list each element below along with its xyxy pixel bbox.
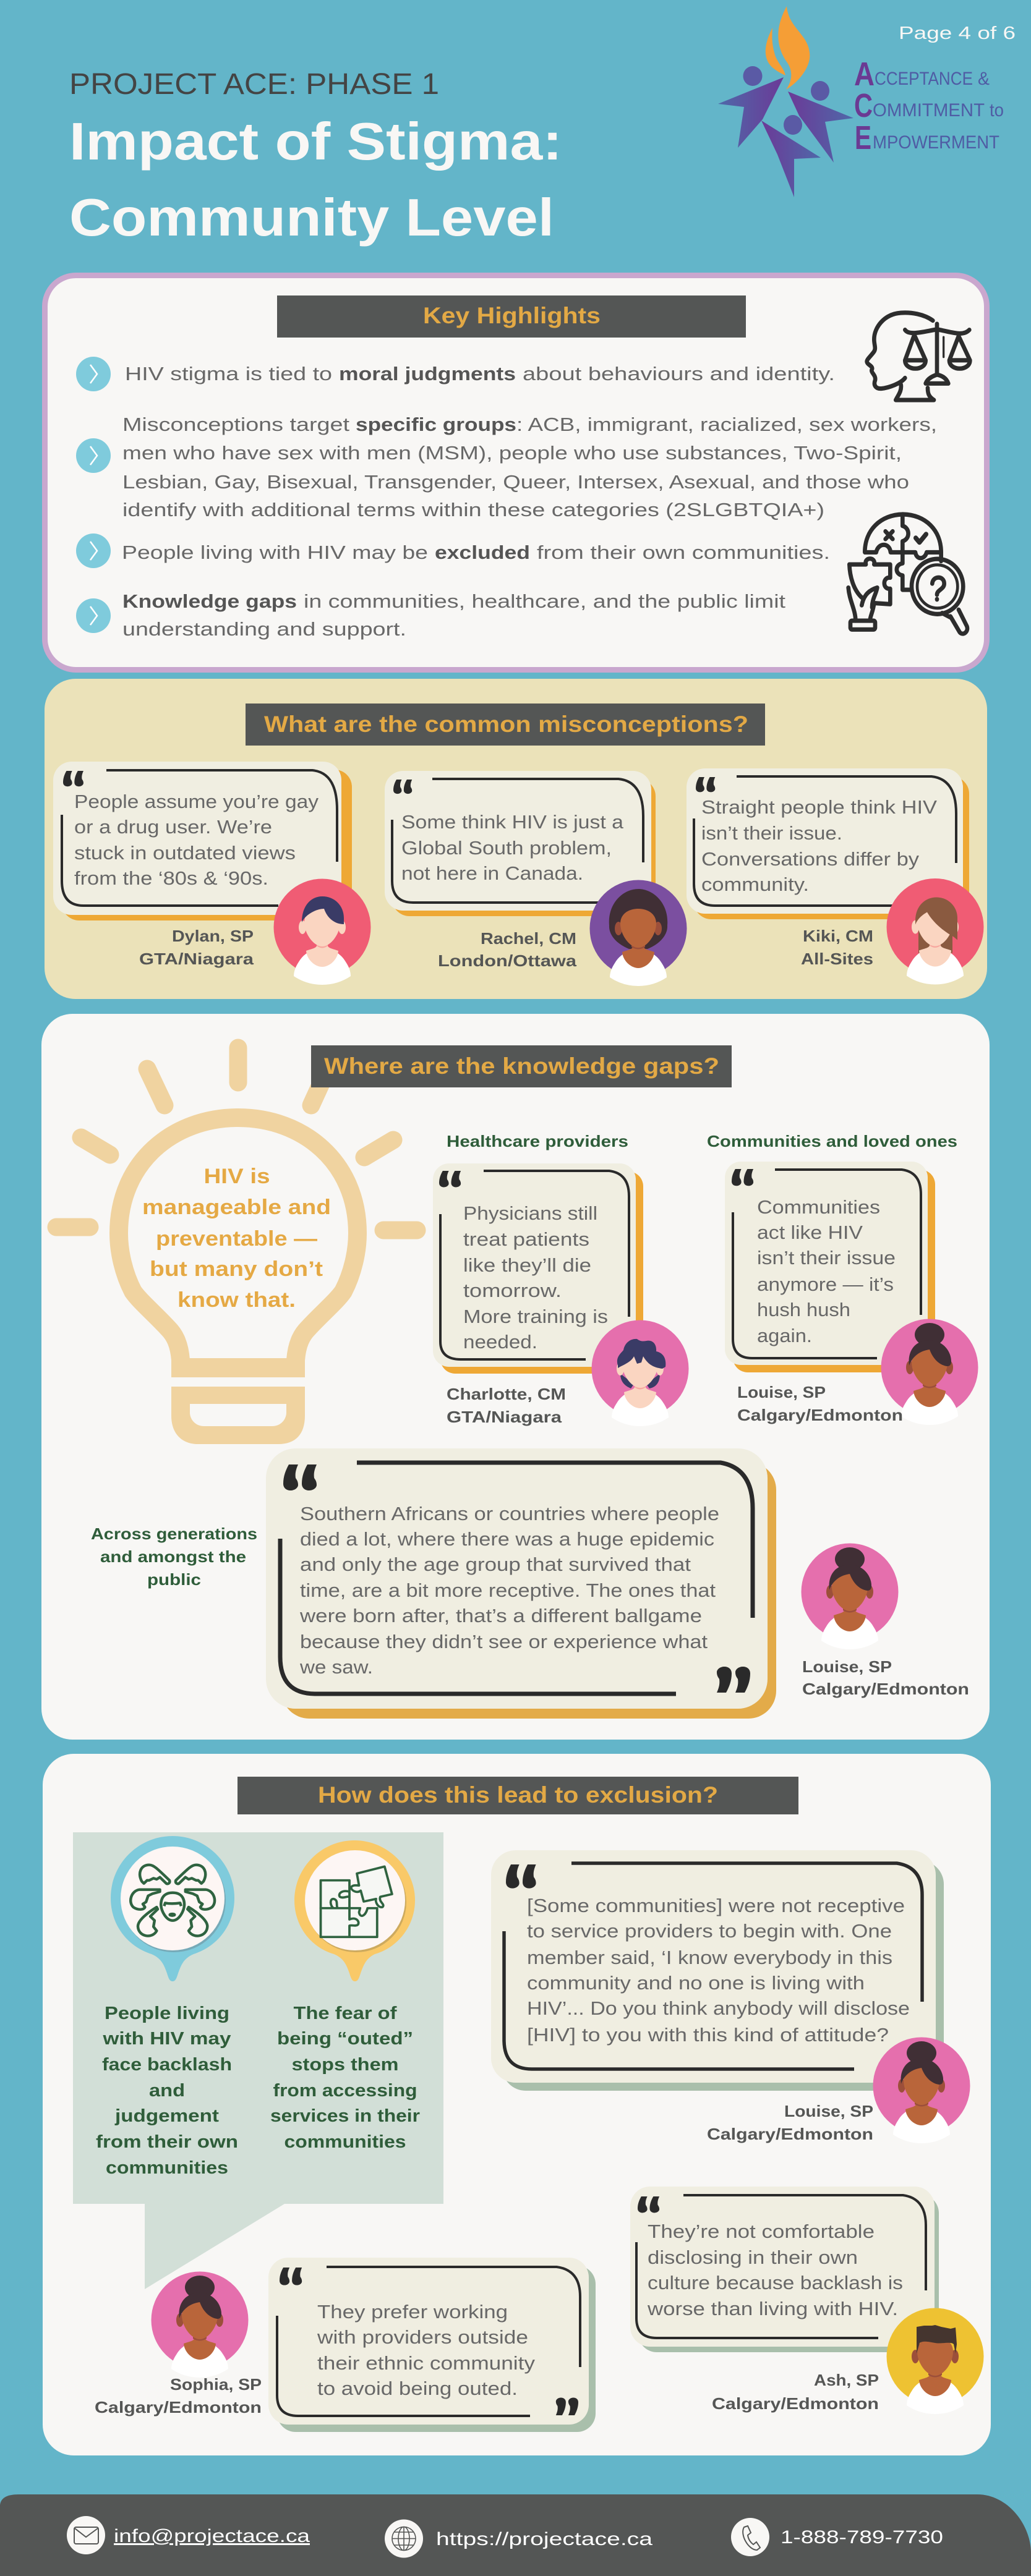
- attribution: Louise: [802, 1657, 969, 1698]
- quote: Charlotte: [433, 1163, 643, 1374]
- quote: Southern Africans: Southern Africans or countries where people: [300, 1503, 719, 1524]
- text block: highlights list: specific groups: [356, 414, 516, 435]
- quote: Southern Africans: [266, 1448, 776, 1719]
- quote: prefer working: their ethnic community: [317, 2352, 536, 2374]
- quote: some communities: to service providers to begin with. One: [527, 1920, 892, 1942]
- quote: Rachel: not here in Canada.: [401, 862, 583, 884]
- attribution: Charlotte: GTA/Niagara: [447, 1408, 562, 1426]
- attribution: Louise: Calgary/Edmonton: [707, 2125, 873, 2143]
- quote: Dylan: from the ‘80s & ‘90s.: [74, 867, 268, 889]
- logo: Acceptance & Commitment to Empowerment: [718, 6, 1004, 197]
- text block: highlights list: men who have sex with men (MSM), people who use substances, Two-Spirit,: [122, 442, 902, 464]
- attribution: Ash: Ash, SP: [814, 2371, 879, 2389]
- quote: Dylan: [53, 762, 352, 920]
- quote: Kiki: [687, 768, 969, 919]
- attribution: Ash: [712, 2371, 879, 2413]
- avatar: Rachel: [590, 880, 687, 986]
- attribution: Louise: [707, 2102, 873, 2143]
- callout: bulb text: manageable and: [142, 1196, 331, 1219]
- heading: exclusion: How does this lead to exclusion?: [318, 1782, 718, 1808]
- heading: knowledge gaps: Where are the knowledge gaps?: [324, 1053, 719, 1079]
- quote: prefer working: to avoid being outed.: [317, 2378, 518, 2399]
- quote: Dylan: People assume you’re gay: [74, 791, 319, 812]
- quote: some communities: community and no one is living with: [527, 1972, 865, 1994]
- avatar: Louise: [873, 2038, 970, 2143]
- avatar: Louise: [881, 1319, 978, 1425]
- quote: Charlotte: treat patients: [463, 1228, 589, 1250]
- quote: Louise communities: hush hush: [757, 1299, 850, 1320]
- quote: some communities: [HIV] to you with this kind of attitude?: [527, 2024, 889, 2046]
- quote: Rachel: Global South problem,: [401, 837, 612, 859]
- attribution: Charlotte: [447, 1385, 566, 1426]
- quote: not comfortable: culture because backlash is: [648, 2272, 903, 2293]
- text block: backlash: with HIV may: [102, 2029, 231, 2049]
- quote: prefer working: with providers outside: [317, 2326, 528, 2348]
- text block: fear of being outed: being “outed”: [277, 2029, 413, 2049]
- icon: pin with puzzle: [294, 1840, 415, 1981]
- logo: Acceptance & Commitment to Empowerment: &: [978, 69, 990, 89]
- title: Impact of Stigma:: [69, 113, 562, 171]
- quote: Dylan: or a drug user. We’re: [74, 816, 272, 838]
- quote: Kiki: isn’t their issue.: [701, 822, 842, 844]
- callout: bulb text: preventable —: [156, 1227, 317, 1251]
- text block: backlash: face backlash: [102, 2055, 232, 2075]
- avatar: Sophia: [151, 2271, 249, 2378]
- text block: highlights list: : ACB, immigrant, racialized, sex workers,: [516, 414, 937, 435]
- quote: some communities: HIV’... Do you think anybody will disclose: [527, 1997, 910, 2019]
- quote: Southern Africans: and only the age group that survived that: [300, 1554, 691, 1575]
- text block: highlights list: about behaviours and identity.: [523, 363, 835, 385]
- attribution: Kiki: Kiki, CM: [803, 927, 873, 945]
- text block: fear of being outed: The fear of: [293, 2004, 397, 2023]
- quote: prefer working: They prefer working: [317, 2301, 508, 2323]
- quote: not comfortable: [630, 2187, 939, 2352]
- quote: not comfortable: worse than living with HIV.: [647, 2298, 898, 2319]
- heading: Key Highlights: Key Highlights: [423, 303, 601, 328]
- contact: phone: 1-888-789-7730: [781, 2527, 943, 2548]
- quote: Southern Africans: because they didn’t see or experience what: [300, 1631, 708, 1652]
- panel: key highlights: [45, 276, 987, 670]
- heading: common misconceptions: What are the common misconceptions?: [264, 712, 748, 737]
- quote: Louise communities: [725, 1162, 935, 1372]
- text block: highlights list: in communities, healthcare, and the public limit: [304, 590, 785, 612]
- text block: backlash: judgement: [114, 2106, 219, 2126]
- quote: Southern Africans: time, are a bit more receptive. The ones that: [300, 1579, 716, 1601]
- label: communities and loved ones: Communities and loved ones: [707, 1132, 957, 1150]
- logo: Acceptance & Commitment to Empowerment: CCEPTANCE: [875, 69, 973, 89]
- attribution: Louise: Louise, SP: [737, 1383, 826, 1401]
- quote: Southern Africans: were born after, that’s a different ballgame: [299, 1605, 702, 1626]
- quote: prefer working: [268, 2258, 596, 2432]
- label: across generations: and amongst the: [100, 1547, 246, 1566]
- heading: knowledge gaps: [311, 1045, 732, 1087]
- panel: knowledge gaps: [41, 1014, 990, 1740]
- attribution: Dylan: [139, 927, 254, 968]
- text block: fear of being outed: communities: [284, 2132, 406, 2152]
- avatar: Ash: [887, 2308, 983, 2414]
- quote: Southern Africans: died a lot, where there was a huge epidemic: [300, 1528, 714, 1550]
- quote: some communities: [Some communities] were not receptive: [527, 1895, 905, 1916]
- text block: highlights list: Lesbian, Gay, Bisexual, Transgender, Queer, Intersex, Asexual, and those who: [122, 471, 909, 493]
- quote: Louise communities: act like HIV: [757, 1222, 863, 1243]
- logo: Acceptance & Commitment to Empowerment: A: [854, 56, 875, 93]
- attribution: Kiki: [801, 927, 873, 968]
- text block: highlights list: excluded: [435, 542, 530, 563]
- avatar: Dylan: [273, 879, 371, 985]
- attribution: Dylan: GTA/Niagara: [139, 950, 254, 968]
- title: PROJECT ACE: PHASE 1: [69, 68, 439, 101]
- text block: fear of being outed: services in their: [270, 2106, 420, 2126]
- attribution: Sophia: Calgary/Edmonton: [95, 2398, 262, 2417]
- avatar: Louise: [802, 1543, 898, 1649]
- quote: some communities: member said, ‘I know everybody in this: [527, 1947, 892, 1968]
- quote: Dylan: stuck in outdated views: [74, 842, 296, 864]
- text block: highlights list: [122, 363, 937, 640]
- quote: Charlotte: needed.: [463, 1331, 537, 1353]
- quote: Kiki: community.: [701, 874, 809, 895]
- heading: common misconceptions: [246, 704, 765, 746]
- label: across generations: public: [147, 1570, 201, 1589]
- panel: exclusion: [43, 1754, 991, 2455]
- icon: email: [67, 2516, 105, 2554]
- attribution: Rachel: London/Ottawa: [438, 951, 577, 970]
- attribution: Kiki: All-Sites: [801, 950, 873, 968]
- callout: bulb text: [142, 1165, 331, 1312]
- attribution: Rachel: Rachel, CM: [481, 929, 576, 948]
- quote: Kiki: Straight people think HIV: [701, 796, 937, 818]
- attribution: Louise: Louise, SP: [784, 2102, 873, 2120]
- quote: Rachel: Some think HIV is just a: [401, 811, 624, 833]
- text block: highlights list: HIV stigma is tied to: [125, 363, 332, 385]
- title: Community Level: [69, 189, 554, 247]
- text block: backlash: People living: [105, 2004, 229, 2023]
- label: across generations: [91, 1524, 257, 1589]
- heading: Key Highlights: [277, 295, 746, 338]
- attribution: Louise: Calgary/Edmonton: [737, 1406, 903, 1424]
- text block: backlash: [96, 2004, 238, 2178]
- speech panel: consequences: [73, 1832, 443, 2289]
- contact: website: https://projectace.ca: [436, 2529, 652, 2549]
- attribution: Louise: [737, 1383, 903, 1424]
- icon: phone: [731, 2518, 769, 2556]
- text block: backlash: communities: [106, 2158, 228, 2178]
- logo: Acceptance & Commitment to Empowerment: OMMITMENT: [873, 100, 985, 121]
- quote: Louise communities: anymore — it’s: [757, 1273, 894, 1295]
- label: across generations: Across generations: [91, 1524, 257, 1543]
- callout: bulb text: know that.: [178, 1288, 296, 1312]
- attribution: Rachel: [438, 929, 577, 970]
- heading: exclusion: [237, 1777, 798, 1814]
- text block: highlights list: People living with HIV may be: [122, 542, 428, 563]
- quote: Charlotte: More training is: [463, 1306, 608, 1327]
- quote: Charlotte: tomorrow.: [463, 1280, 562, 1301]
- callout: bulb text: HIV is: [204, 1165, 270, 1188]
- logo: Acceptance & Commitment to Empowerment: MPOWERMENT: [873, 132, 999, 153]
- text block: backlash: from their own: [96, 2132, 238, 2152]
- footer: [0, 2494, 1031, 2576]
- icon: puzzle, hand and magnifier: [849, 514, 967, 634]
- quote: Charlotte: like they’ll die: [463, 1254, 591, 1276]
- logo: Acceptance & Commitment to Empowerment: E: [855, 119, 871, 156]
- attribution: Ash: Calgary/Edmonton: [712, 2394, 879, 2413]
- attribution: Dylan: Dylan, SP: [172, 927, 254, 945]
- attribution: Sophia: Sophia, SP: [170, 2375, 262, 2394]
- text block: highlights list: understanding and support.: [122, 618, 406, 640]
- avatar: Charlotte: [591, 1320, 689, 1426]
- text block: highlights list: moral judgments: [339, 363, 516, 385]
- icon: light bulb: [56, 1048, 417, 1444]
- quote: Southern Africans: we saw.: [299, 1656, 373, 1678]
- quote: Louise communities: isn’t their issue: [757, 1247, 896, 1269]
- icon: pin with hands pointing at face: [111, 1836, 234, 1981]
- label: healthcare providers: Healthcare providers: [447, 1132, 628, 1150]
- icon: globe: [385, 2520, 423, 2558]
- attribution: Charlotte: Charlotte, CM: [447, 1385, 566, 1403]
- bullet icons: [76, 357, 111, 633]
- page number: Page 4 of 6: [899, 23, 1016, 43]
- text block: highlights list: Misconceptions target: [122, 414, 349, 435]
- attribution: Louise: Louise, SP: [802, 1657, 892, 1676]
- avatar: Kiki: [887, 878, 983, 984]
- text block: fear of being outed: [270, 2004, 420, 2152]
- panel: common misconceptions: [45, 679, 987, 999]
- logo: Acceptance & Commitment to Empowerment: to: [990, 100, 1004, 121]
- quote: Kiki: Conversations differ by: [701, 848, 920, 870]
- quote: Charlotte: Physicians still: [463, 1202, 597, 1224]
- callout: bulb text: but many don’t: [150, 1257, 323, 1281]
- text block: highlights list: from their own communities.: [537, 542, 830, 563]
- icon: head with scales: [867, 313, 970, 400]
- quote: not comfortable: They’re not comfortable: [648, 2221, 875, 2242]
- quote: some communities: [491, 1850, 944, 2091]
- text block: backlash: and: [149, 2081, 185, 2101]
- quote: Louise communities: again.: [757, 1325, 812, 1346]
- logo: Acceptance & Commitment to Empowerment: C: [854, 87, 873, 124]
- quote: not comfortable: disclosing in their own: [648, 2247, 858, 2268]
- text block: fear of being outed: stops them: [292, 2055, 398, 2075]
- attribution: Sophia: [95, 2375, 262, 2417]
- quote: Rachel: [385, 771, 656, 916]
- text block: highlights list: Knowledge gaps: [122, 590, 297, 612]
- text block: fear of being outed: from accessing: [273, 2081, 417, 2101]
- attribution: Louise: Calgary/Edmonton: [802, 1680, 969, 1698]
- quote: Louise communities: Communities: [757, 1196, 880, 1218]
- text block: highlights list: identify with additional terms within these categories (2SLGBTQIA+): [122, 499, 824, 521]
- contact: email: info@projectace.ca: [114, 2526, 310, 2546]
- title: [69, 68, 562, 247]
